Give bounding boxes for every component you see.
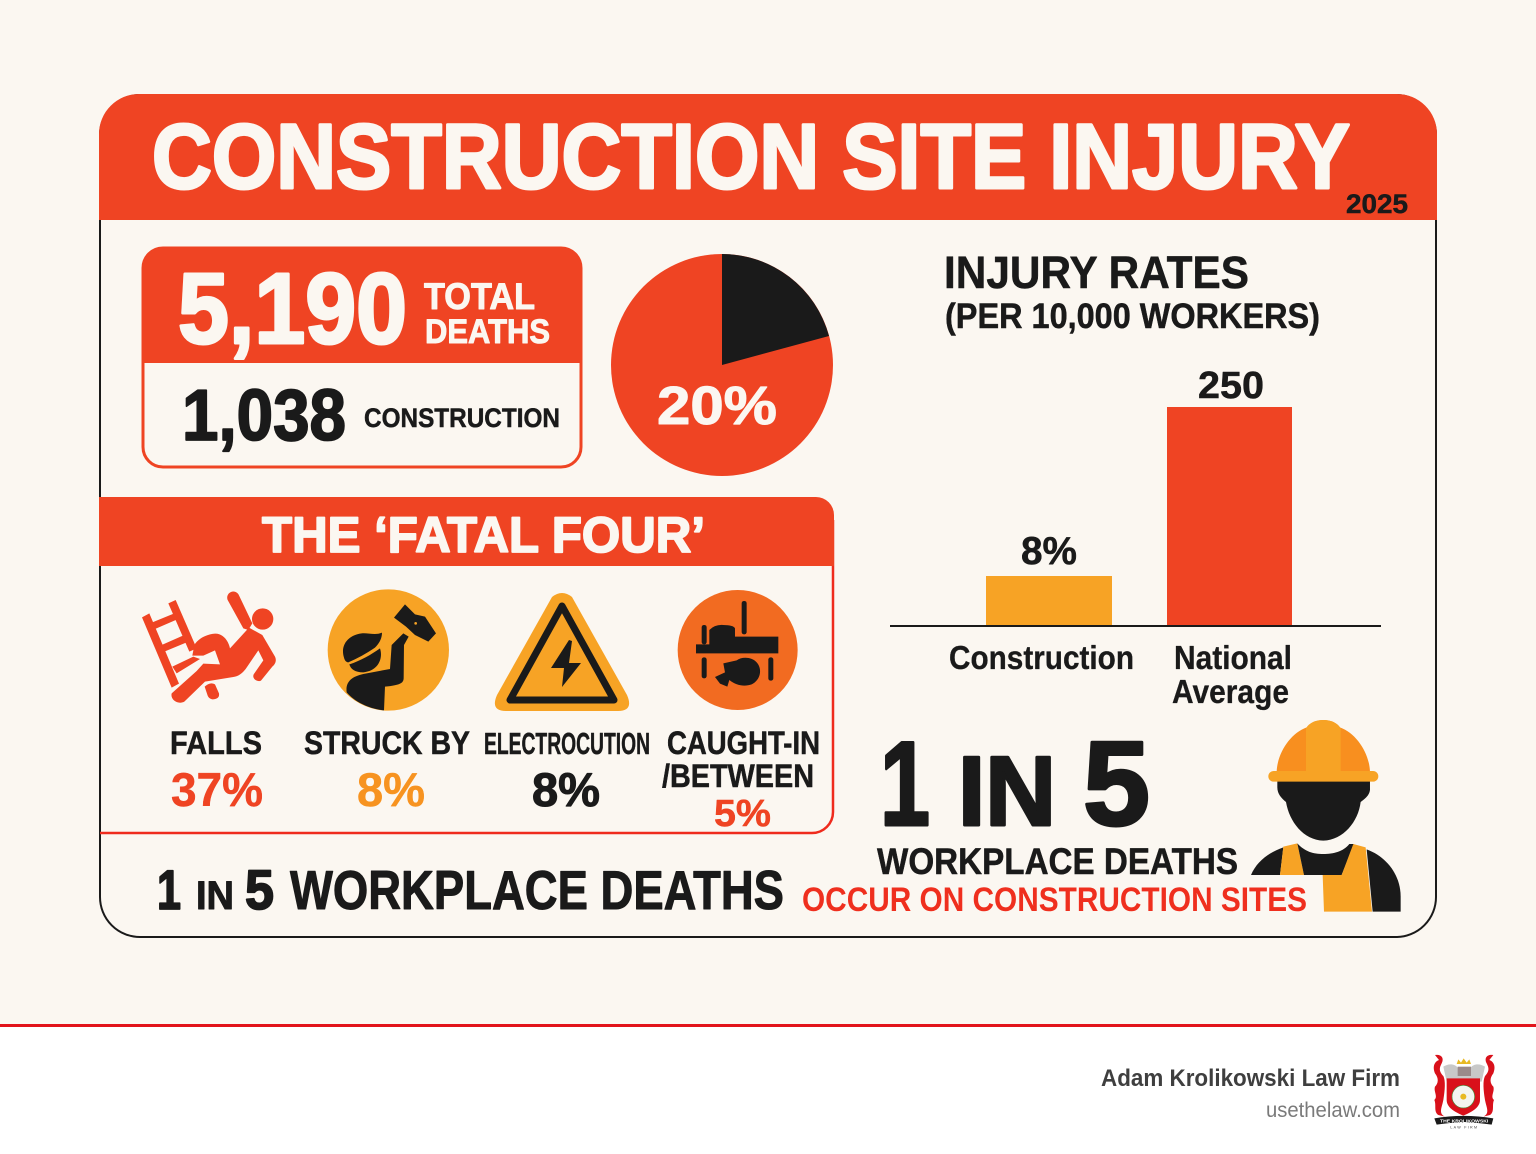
statement: 1 in 5 large: IN bbox=[958, 736, 1056, 846]
total deaths label: TOTAL bbox=[424, 276, 535, 317]
statement: 1 in 5 workplace deaths: IN bbox=[196, 874, 234, 918]
statement: 1 in 5 workplace deaths: 1 bbox=[157, 858, 181, 921]
label: struck by: STRUCK BY bbox=[304, 725, 470, 761]
value: national average: 250 bbox=[1198, 365, 1264, 407]
title: CONSTRUCTION SITE INJURY bbox=[152, 106, 1350, 208]
total deaths label bbox=[424, 276, 550, 351]
bar: national average bbox=[1167, 407, 1292, 626]
icon: firm crest: THE KROLIKOWSKI bbox=[1440, 1118, 1489, 1124]
icon: falling from ladder bbox=[142, 592, 276, 703]
axis label: national average bbox=[1172, 639, 1292, 710]
label: falls bbox=[170, 725, 263, 816]
main panel bbox=[99, 94, 1437, 937]
year label: 2025 bbox=[1346, 189, 1408, 219]
statement: 1 in 5 workplace deaths bbox=[157, 858, 784, 921]
icon: caught-in or between bbox=[678, 590, 798, 710]
icon: firm crest: LAW FIRM bbox=[1450, 1126, 1477, 1130]
pie label: 20% bbox=[657, 376, 777, 436]
icon: struck by falling hammer bbox=[328, 589, 449, 711]
label: electrocution: 8% bbox=[532, 763, 600, 816]
panel: total deaths bbox=[142, 247, 582, 467]
label: falls: 37% bbox=[171, 763, 263, 816]
axis label: construction: Construction bbox=[949, 639, 1134, 676]
label: caught-in between: /BETWEEN bbox=[662, 758, 814, 794]
statement: 1 in 5 large: 5 bbox=[1083, 717, 1150, 851]
icon: firm crest bbox=[1434, 1055, 1495, 1130]
total deaths label: DEATHS bbox=[425, 313, 550, 351]
firm name: Adam Krolikowski Law Firm bbox=[1101, 1065, 1400, 1092]
label: electrocution: ELECTROCUTION bbox=[484, 726, 650, 761]
construction deaths number: 1,038 bbox=[182, 376, 346, 456]
heading: injury rates bbox=[944, 247, 1320, 336]
value: construction: 8% bbox=[1021, 530, 1077, 573]
heading: injury rates: (PER 10,000 WORKERS) bbox=[945, 297, 1320, 336]
firm website: usethelaw.com bbox=[1266, 1099, 1400, 1122]
statement: 1 in 5 large: 1 bbox=[880, 717, 930, 851]
label: falls: FALLS bbox=[170, 725, 262, 761]
bar: construction bbox=[986, 576, 1112, 626]
pie chart: 20% share bbox=[611, 254, 833, 476]
caption: workplace deaths: WORKPLACE DEATHS bbox=[877, 841, 1238, 882]
total deaths number: 5,190 bbox=[178, 253, 407, 365]
statement: 1 in 5 workplace deaths: WORKPLACE DEATHS bbox=[290, 859, 784, 921]
footer bbox=[0, 1024, 1536, 1154]
icon: electrocution warning bbox=[495, 593, 629, 711]
label: caught-in between bbox=[662, 725, 820, 835]
heading: injury rates: INJURY RATES bbox=[944, 247, 1249, 298]
label: struck by bbox=[304, 725, 470, 816]
label: caught-in between: 5% bbox=[714, 793, 771, 835]
caption: occur on construction sites: OCCUR ON CONSTRUCTION SITES bbox=[802, 881, 1307, 919]
statement: 1 in 5 workplace deaths: 5 bbox=[245, 858, 274, 921]
fatal four heading: THE ‘FATAL FOUR’ bbox=[262, 507, 705, 563]
label: struck by: 8% bbox=[357, 763, 425, 816]
construction deaths label: CONSTRUCTION bbox=[364, 403, 560, 433]
axis label: national average: Average bbox=[1172, 673, 1289, 710]
panel: the fatal four bbox=[99, 497, 834, 835]
axis label: national average: National bbox=[1174, 639, 1292, 676]
icon: construction worker bbox=[1251, 720, 1401, 912]
statement: 1 in 5 large bbox=[880, 717, 1150, 851]
label: caught-in between: CAUGHT-IN bbox=[667, 725, 820, 761]
title banner bbox=[99, 94, 1437, 220]
label: electrocution bbox=[484, 726, 650, 816]
bar chart: injury rates bbox=[890, 365, 1381, 710]
